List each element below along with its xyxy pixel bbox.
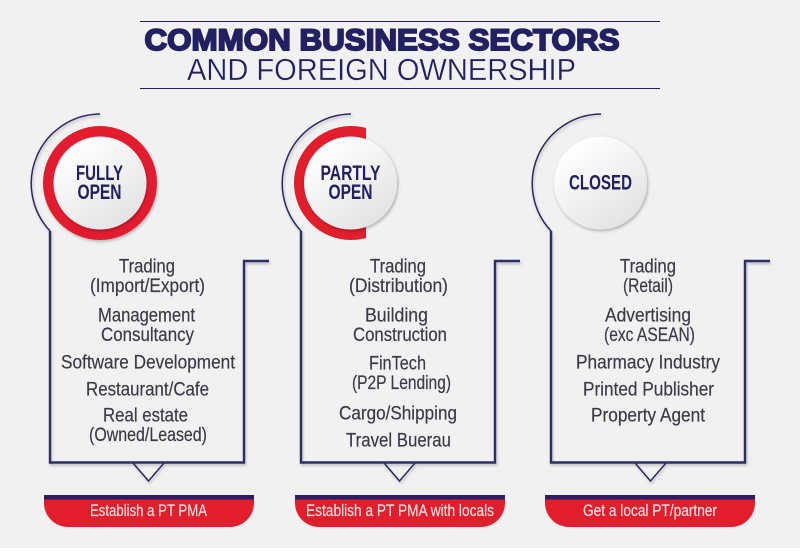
badge: fully open: FULLY: [76, 161, 123, 185]
title: COMMON BUSINESS SECTORS: [144, 24, 620, 57]
footer: establish a PT PMA: Establish a PT PMA: [90, 502, 207, 520]
list: closed sectors: Property Agent: [591, 406, 706, 426]
list: partly open sectors: Trading: [370, 256, 426, 278]
footer: get a local PT/partner: [545, 495, 755, 527]
list: closed sectors: Pharmacy Industry: [576, 352, 720, 374]
list: closed sectors: Advertising: [605, 306, 691, 326]
list: partly open sectors: FinTech: [369, 354, 426, 374]
panel: closed: [532, 114, 770, 527]
panel: partly open: [282, 114, 520, 527]
list: partly open sectors: Travel Buerau: [346, 430, 451, 452]
list: fully open sectors: Consultancy: [101, 325, 194, 346]
footer: get a local PT/partner: Get a local PT/partner: [583, 502, 717, 520]
list: fully open sectors: Software Development: [61, 352, 236, 374]
list: closed sectors: [576, 256, 720, 426]
list: fully open sectors: Trading: [119, 256, 175, 278]
list: fully open sectors: (Owned/Leased): [89, 425, 207, 446]
panel: fully open: [31, 114, 269, 527]
outline frame: [282, 114, 520, 481]
list: partly open sectors: Cargo/Shipping: [339, 404, 457, 424]
footer: establish a PT PMA: [44, 495, 254, 527]
footer: establish a PT PMA with locals: Establish a PT PMA with locals: [306, 502, 494, 520]
badge: closed: [554, 136, 647, 230]
list: fully open sectors: Restaurant/Cafe: [86, 380, 209, 400]
badge: partly open: PARTLY: [320, 161, 380, 185]
badge: fully open: [43, 126, 157, 240]
badge: closed: CLOSED: [569, 170, 632, 194]
list: closed sectors: Trading: [620, 256, 676, 278]
list: partly open sectors: Building: [365, 306, 428, 326]
footer: establish a PT PMA with locals: [295, 495, 505, 527]
list: partly open sectors: [339, 256, 457, 452]
list: fully open sectors: Real estate: [103, 406, 188, 426]
title: AND FOREIGN OWNERSHIP: [187, 52, 576, 87]
badge: partly open: OPEN: [328, 180, 372, 204]
title: [140, 22, 660, 88]
list: fully open sectors: Management: [98, 306, 196, 326]
list: partly open sectors: (Distribution): [349, 276, 448, 297]
badge: partly open: [294, 126, 408, 240]
list: fully open sectors: [61, 256, 236, 446]
outline frame: [532, 114, 770, 481]
list: partly open sectors: Construction: [353, 325, 447, 346]
list: closed sectors: Printed Publisher: [583, 380, 715, 400]
list: fully open sectors: (Import/Export): [90, 276, 205, 297]
list: closed sectors: (Retail): [623, 276, 673, 297]
list: closed sectors: (exc ASEAN): [604, 325, 695, 346]
badge: fully open: OPEN: [78, 180, 122, 204]
outline frame: [31, 114, 269, 481]
list: partly open sectors: (P2P Lending): [352, 373, 451, 394]
